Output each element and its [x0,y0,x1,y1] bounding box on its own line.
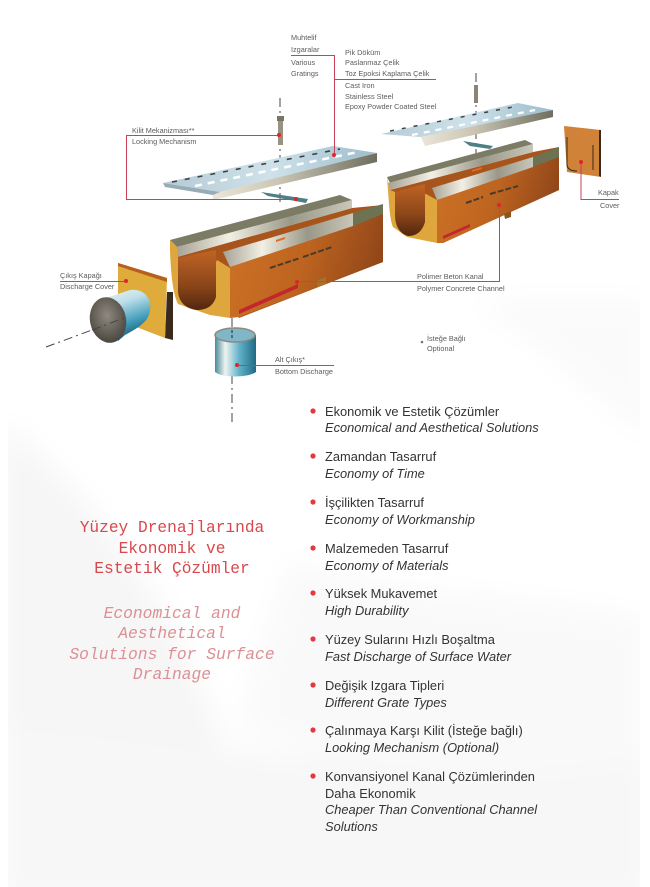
discharge cover [118,263,173,340]
item 5 [310,586,438,618]
callout: grating materials: Cast Iron [345,81,375,90]
heading: English title: Drainage [133,665,211,684]
heading: Turkish title: Estetik Çözümler [94,560,250,578]
callout: locking mechanism: Locking Mechanism [132,137,196,146]
callout: grating materials: Pik Döküm [345,48,380,57]
callout: locking mechanism [126,126,298,201]
callout: polymer concrete channel: Polimer Beton Kanal [417,272,484,281]
grating [381,103,553,146]
heading: English title: Solutions for Surface [69,645,275,664]
item 8: Çalınmaya Karşı Kilit (İsteğe bağlı) [325,723,523,738]
item 3: Economy of Workmanship [325,512,475,527]
callout: various gratings: Various [291,58,316,67]
heading: Turkish title: Ekonomik ve [119,540,225,558]
benefits list [310,404,539,834]
item 1: Economical and Aesthetical Solutions [325,420,539,435]
item 2: Economy of Time [325,466,425,481]
callout: various gratings: Muhtelif [291,33,318,42]
item 7: Different Grate Types [325,695,447,710]
callout: bottom discharge [235,355,334,376]
item 8: Looking Mechanism (Optional) [325,740,499,755]
item 9: Daha Ekonomik [325,786,416,801]
item 7 [310,678,447,710]
callout: bottom discharge: Bottom Discharge [275,367,333,376]
heading: Turkish title: Yüzey Drenajlarında [80,519,265,537]
bolt [474,85,478,103]
callout: bottom discharge: Alt Çıkış* [275,355,305,364]
callout: cover [579,160,620,210]
item 6 [310,632,512,664]
callout: grating materials: Stainless Steel [345,92,394,101]
item 5: High Durability [325,603,410,618]
callout: grating materials: Epoxy Powder Coated Steel [345,102,437,111]
channel [387,140,559,243]
callout: discharge cover: Discharge Cover [60,282,115,291]
item 3: İşçilikten Tasarruf [325,495,424,510]
callout: discharge cover: Çıkış Kapağı [60,271,102,280]
axis lines [46,73,476,422]
item 3 [310,495,475,527]
polymer channel [170,195,383,318]
item 2 [310,449,437,481]
item 5: Yüksek Mukavemet [325,586,438,601]
end cover [564,126,601,177]
bottom discharge pipe [215,328,256,376]
locking plate [261,192,308,203]
callout: grating materials: Toz Epoksi Kaplama Çelik [345,69,430,78]
callout: grating materials [345,48,437,111]
heading: English title: Economical and [104,604,241,623]
item 9: Cheaper Than Conventional Channel [325,802,538,817]
discharge pipe [86,290,150,346]
note: optional [421,334,466,353]
callout: grating materials: Paslanmaz Çelik [345,58,400,67]
callout: cover: Kapak [598,188,619,197]
note: optional: İsteğe Bağlı [427,334,466,343]
heading: Turkish title [80,519,265,578]
exploded diagram: short channel assembly [381,85,601,243]
item 4: Malzemeden Tasarruf [325,541,449,556]
callout: polymer concrete channel: Polymer Concrete Channel [417,284,505,293]
callout: various gratings: Izgaralar [291,45,320,54]
item 6: Fast Discharge of Surface Water [325,649,512,664]
item 8 [310,723,523,755]
item 1: Ekonomik ve Estetik Çözümler [325,404,500,419]
item 1 [310,404,539,435]
exploded diagram: main channel assembly [46,73,476,422]
item 9 [310,769,538,834]
heading: English title: Aesthetical [117,624,226,643]
grating [163,146,377,200]
callout: discharge cover [60,271,128,291]
item 4 [310,541,449,573]
callout: cover: Cover [600,201,620,210]
item 9: Solutions [325,819,378,834]
callout: various gratings: Gratings [291,69,319,78]
callout: locking mechanism: Kilit Mekanizması** [132,126,195,135]
callout: various gratings [291,33,436,157]
callout: polymer concrete channel [295,203,505,293]
note: optional: Optional [427,344,455,353]
locking bolt [277,116,284,145]
heading: English title [69,604,275,684]
item 6: Yüzey Sularını Hızlı Boşaltma [325,632,496,647]
item 4: Economy of Materials [325,558,449,573]
locking plate [463,141,493,149]
item 2: Zamandan Tasarruf [325,449,437,464]
item 7: Değişik Izgara Tipleri [325,678,444,693]
item 9: Konvansiyonel Kanal Çözümlerinden [325,769,535,784]
